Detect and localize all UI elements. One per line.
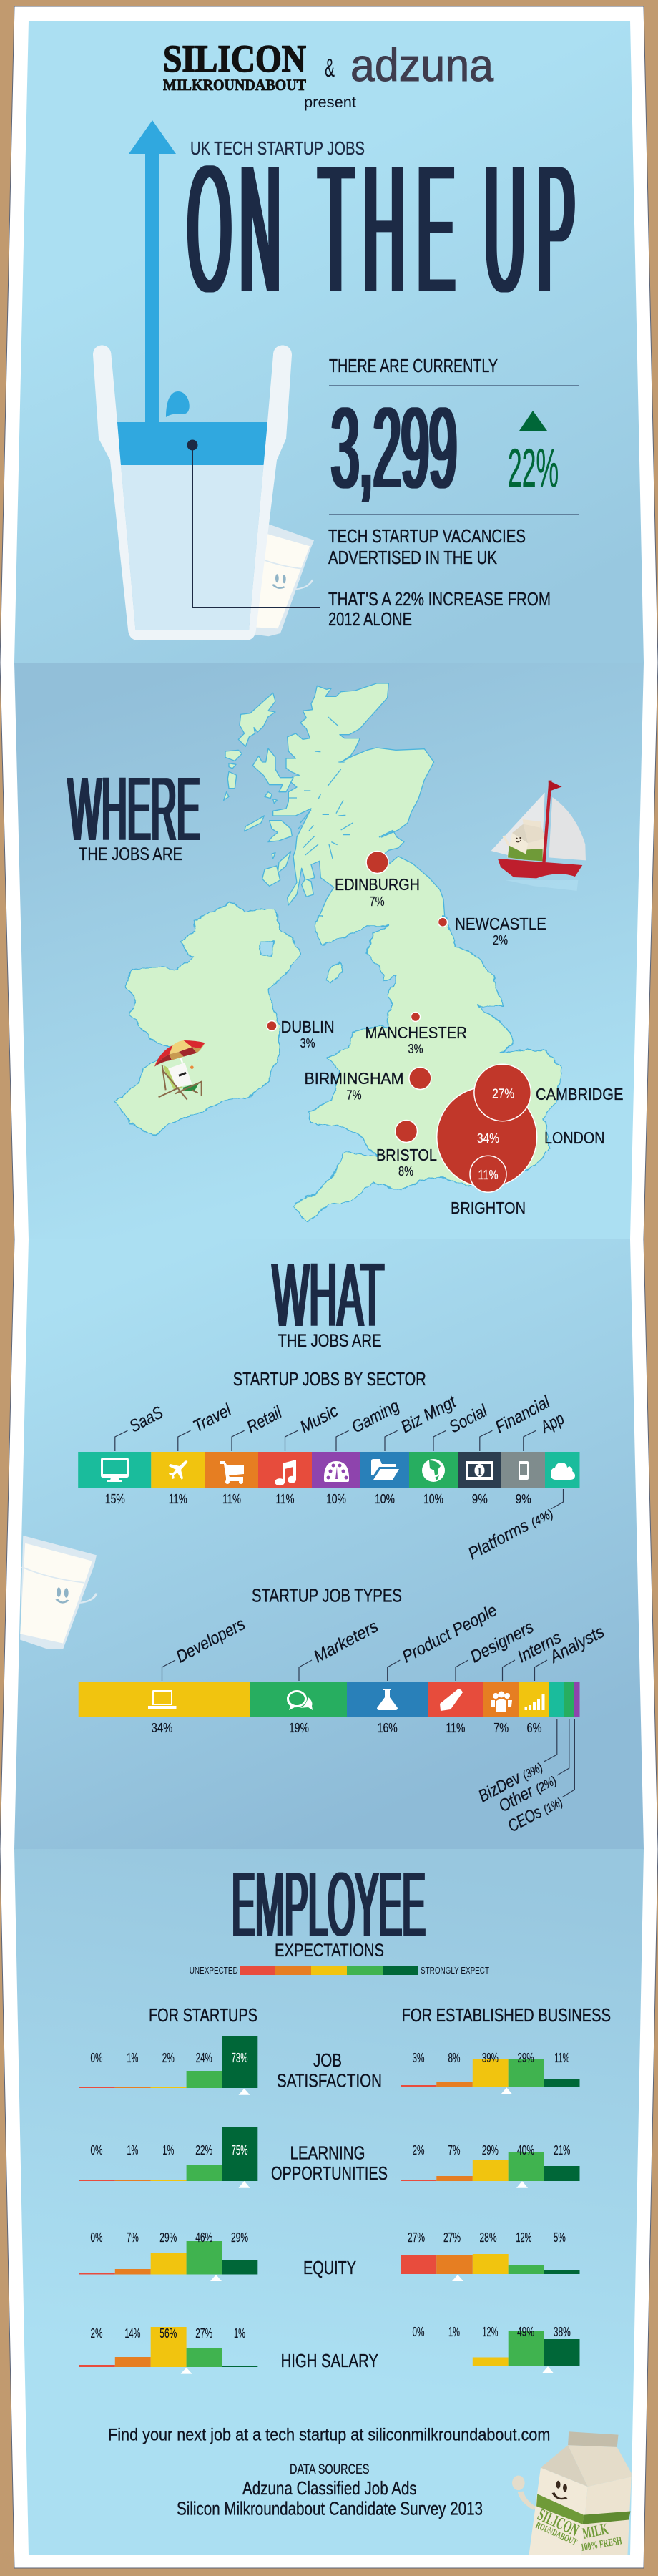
chart: established learning: 2% — [412, 2143, 425, 2157]
chart: startups job satisfaction: 2% — [162, 2051, 175, 2065]
callout line — [187, 439, 320, 608]
row label: learning opportunities — [271, 2142, 388, 2184]
map markers and city labels: LONDON — [544, 1128, 605, 1147]
chart: startups equity: 7% — [127, 2230, 139, 2245]
chart: startups job satisfaction — [79, 2036, 257, 2095]
chart: startups high salary — [79, 2326, 257, 2374]
map markers and city labels: 2% — [493, 933, 508, 947]
job type percentages: 16% — [378, 1721, 398, 1735]
map markers and city labels — [267, 852, 624, 1217]
map markers and city labels: 8% — [398, 1164, 413, 1179]
chart: startups equity — [79, 2230, 257, 2281]
map markers and city labels: MANCHESTER — [365, 1023, 467, 1042]
sector percentages: 10% — [423, 1492, 443, 1506]
data sources: Silicon Milkroundabout Candidate Survey 2013 — [177, 2497, 483, 2519]
text: WHERE — [68, 758, 200, 859]
job type leaders — [162, 1660, 574, 1797]
map markers and city labels: 7% — [346, 1088, 362, 1103]
sector percentages: 11% — [169, 1492, 187, 1506]
job type labels: BizDev (3%) — [476, 1757, 546, 1806]
row label: high salary: HIGH SALARY — [281, 2350, 378, 2371]
chart: established learning: 40% — [517, 2143, 534, 2157]
job type percentages: 6% — [526, 1721, 542, 1735]
stat panel — [328, 355, 579, 630]
job type labels: Product People — [399, 1601, 501, 1667]
chart: startups job satisfaction: 24% — [196, 2051, 212, 2065]
row label: job satisfaction — [277, 2049, 382, 2092]
row: equity — [79, 2230, 580, 2281]
map: Scotland and islands — [224, 683, 445, 916]
carton label text: 100% FRESH — [580, 2535, 623, 2554]
chart: established high salary — [401, 2325, 579, 2373]
map markers and city labels: 11% — [478, 1168, 498, 1182]
stat panel: THERE ARE CURRENTLY — [329, 355, 498, 376]
chart: established high salary: 12% — [482, 2325, 498, 2339]
sector labels: Music — [297, 1401, 341, 1437]
stat panel: THAT'S A 22% INCREASE FROM — [328, 588, 551, 610]
stat panel: TECH STARTUP VACANCIES — [328, 525, 526, 547]
sector percentages: 10% — [326, 1492, 346, 1506]
carton label text: SILICON — [535, 2506, 581, 2540]
chart: startups job satisfaction: 0% — [90, 2051, 103, 2065]
chart: startups high salary: 14% — [124, 2326, 140, 2341]
chart: startups learning: 1% — [162, 2143, 174, 2157]
sector labels: Gaming — [348, 1396, 403, 1437]
heading: employee expectations — [232, 1854, 426, 1961]
row: job satisfaction — [79, 2036, 580, 2095]
job type percentages: 34% — [152, 1721, 173, 1735]
job type labels: CEOs (1%) — [505, 1792, 566, 1836]
sector percentages: 9% — [516, 1492, 531, 1506]
chart: established learning: 7% — [448, 2143, 461, 2157]
job type labels: Analysts — [546, 1622, 608, 1667]
job type labels: Developers — [173, 1614, 248, 1667]
footer call to action: Find your next job at a tech startup at siliconmilkroundabout.com — [108, 2426, 550, 2444]
map markers and city labels: NEWCASTLE — [455, 914, 546, 933]
job type labels: Marketers — [310, 1616, 381, 1667]
sector labels: Financial — [492, 1392, 554, 1437]
sector labels: Biz Mngt — [398, 1392, 460, 1437]
chart: startups learning: 0% — [90, 2143, 103, 2157]
chart: established job satisfaction: 8% — [448, 2051, 461, 2065]
map markers and city labels: 34% — [477, 1131, 499, 1146]
chart: established high salary: 1% — [448, 2325, 460, 2339]
sector labels: SaaS — [127, 1402, 167, 1436]
chart: established job satisfaction: 11% — [554, 2051, 569, 2065]
chart: established learning — [401, 2143, 579, 2188]
mascot: milk carton — [512, 2431, 632, 2555]
stacked bar: sectors — [78, 1452, 579, 1488]
legend: STRONGLY EXPECT — [421, 1965, 489, 1976]
sector icon details — [326, 1460, 491, 1480]
map markers and city labels: 7% — [369, 894, 385, 909]
heading: where — [68, 758, 200, 864]
sector percentages: 15% — [105, 1492, 125, 1506]
ampersand: & — [325, 53, 335, 82]
heading: employee expectations: EXPECTATIONS — [275, 1941, 384, 1961]
sector labels: Retail — [244, 1402, 285, 1437]
chart: startups learning: 1% — [127, 2143, 138, 2157]
map markers and city labels: 3% — [408, 1042, 423, 1056]
chart: established equity: 12% — [516, 2230, 531, 2245]
chart: startups high salary: 27% — [195, 2326, 212, 2341]
map markers and city labels: BIRMINGHAM — [305, 1069, 403, 1088]
sector labels — [127, 1392, 567, 1563]
row label: learning opportunities: OPPORTUNITIES — [271, 2162, 388, 2184]
sector percentages — [105, 1492, 531, 1506]
job type labels: Designers — [467, 1617, 537, 1667]
icon: milk drop — [166, 391, 190, 417]
stat panel: 22% — [508, 438, 559, 499]
stat panel: 3,299 — [331, 384, 457, 512]
sector percentages: 10% — [375, 1492, 395, 1506]
chart: startups high salary: 1% — [234, 2326, 245, 2341]
chart: established equity: 27% — [408, 2230, 425, 2245]
chart: established high salary: 49% — [517, 2325, 534, 2339]
chart: startups equity: 29% — [159, 2230, 177, 2245]
chart: startups equity: 29% — [231, 2230, 248, 2245]
present: present — [304, 94, 356, 111]
sector labels: Platforms (4%) — [465, 1503, 556, 1563]
job type labels: Interns — [514, 1628, 564, 1667]
seam patch — [323, 912, 442, 920]
row label: job satisfaction: SATISFACTION — [277, 2070, 382, 2092]
chart: startups equity: 0% — [90, 2230, 103, 2245]
carton label text: ROUNDABOUT — [534, 2519, 579, 2547]
column heading: startups: FOR STARTUPS — [149, 2004, 257, 2026]
glass of milk — [93, 345, 292, 640]
chart: established job satisfaction: 29% — [518, 2051, 534, 2065]
chart: established job satisfaction — [401, 2051, 579, 2094]
sector percentages: 11% — [276, 1492, 295, 1506]
chart: established equity: 27% — [443, 2230, 461, 2245]
heading: what: THE JOBS ARE — [278, 1331, 382, 1351]
legend — [190, 1965, 489, 1976]
row label: equity: EQUITY — [303, 2257, 356, 2278]
map: Great Britain and Ireland — [115, 683, 561, 1221]
chart: startups job satisfaction: 73% — [232, 2051, 247, 2065]
sector icon details: 1 — [477, 1466, 482, 1478]
job type labels — [173, 1601, 608, 1836]
chart: startups learning: 22% — [195, 2143, 212, 2157]
job type labels: Other (2%) — [496, 1770, 559, 1816]
chart: startups learning: 75% — [232, 2143, 247, 2157]
chart: established equity: 28% — [479, 2230, 496, 2245]
chart: established equity — [401, 2230, 579, 2281]
row: high salary — [79, 2325, 580, 2374]
map markers and city labels: BRIGHTON — [451, 1199, 526, 1217]
logo: Silicon Milkroundabout — [163, 37, 306, 94]
job type percentages: 11% — [446, 1721, 465, 1735]
chart: established job satisfaction: 3% — [412, 2051, 425, 2065]
chart: established learning: 21% — [554, 2143, 570, 2157]
row label: learning opportunities: LEARNING — [290, 2142, 365, 2164]
data sources: DATA SOURCES — [290, 2462, 369, 2477]
chart: startups high salary: 2% — [90, 2326, 103, 2341]
arrow: up — [129, 120, 176, 424]
job type percentages — [152, 1721, 542, 1735]
sector leaders — [115, 1430, 564, 1509]
heading: what — [272, 1244, 384, 1351]
chart: established high salary: 38% — [554, 2325, 571, 2339]
chart: established equity: 5% — [554, 2230, 566, 2245]
carton label text: MILK — [581, 2519, 609, 2542]
map markers and city labels: BRISTOL — [376, 1146, 437, 1164]
logo: Silicon Milkroundabout: SILICON — [163, 37, 306, 80]
icon: sailboat with milk carton — [491, 781, 586, 891]
mascot: milk glass peeking — [254, 521, 314, 636]
job type percentages: 19% — [289, 1721, 309, 1735]
data sources: Adzuna Classified Job Ads — [242, 2477, 417, 2499]
icon: deckchair mascot with parasol — [154, 1040, 205, 1100]
chart title: job types: STARTUP JOB TYPES — [252, 1585, 402, 1606]
sector icons — [101, 1458, 575, 1485]
map markers and city labels: 3% — [300, 1036, 315, 1050]
sector percentages: 11% — [222, 1492, 241, 1506]
mascot: milk glass on left edge — [20, 1536, 97, 1649]
title: ON THE UP — [187, 127, 575, 331]
map markers and city labels: 27% — [492, 1086, 514, 1101]
row label: job satisfaction: JOB — [313, 2049, 342, 2071]
legend: UNEXPECTED — [190, 1965, 238, 1976]
chart: established learning: 29% — [482, 2143, 499, 2157]
chart title: sector: STARTUP JOBS BY SECTOR — [233, 1368, 426, 1390]
chart: established job satisfaction: 39% — [482, 2051, 499, 2065]
row: learning opportunities — [79, 2127, 580, 2188]
chart: startups high salary: 56% — [159, 2326, 177, 2341]
logo: Silicon Milkroundabout: MILKROUNDABOUT — [163, 76, 306, 94]
chart: startups job satisfaction: 1% — [127, 2051, 138, 2065]
sector labels: App — [536, 1409, 567, 1438]
text: WHAT — [272, 1244, 384, 1345]
map markers and city labels: EDINBURGH — [335, 875, 420, 894]
data sources — [177, 2462, 483, 2519]
chart: startups learning — [79, 2127, 257, 2188]
map markers and city labels: CAMBRIDGE — [536, 1085, 624, 1103]
job type icons — [148, 1689, 545, 1712]
job type percentages: 7% — [494, 1721, 509, 1735]
logo: adzuna: adzuna — [350, 39, 494, 91]
chart: established high salary: 0% — [412, 2325, 425, 2339]
subtitle: UK TECH STARTUP JOBS — [190, 137, 365, 159]
chart: startup jobs by sector — [78, 1368, 579, 1563]
stat panel: ADVERTISED IN THE UK — [328, 547, 498, 568]
heading: where: THE JOBS ARE — [79, 844, 182, 864]
stat panel: 2012 ALONE — [328, 608, 412, 630]
sector percentages: 9% — [472, 1492, 488, 1506]
chart: startup job types — [79, 1585, 608, 1836]
sector labels: Social — [446, 1401, 491, 1437]
chart: startups equity: 46% — [195, 2230, 212, 2245]
map markers and city labels: DUBLIN — [281, 1018, 335, 1036]
sector labels: Travel — [190, 1400, 235, 1436]
stacked bar: job types — [79, 1682, 579, 1717]
